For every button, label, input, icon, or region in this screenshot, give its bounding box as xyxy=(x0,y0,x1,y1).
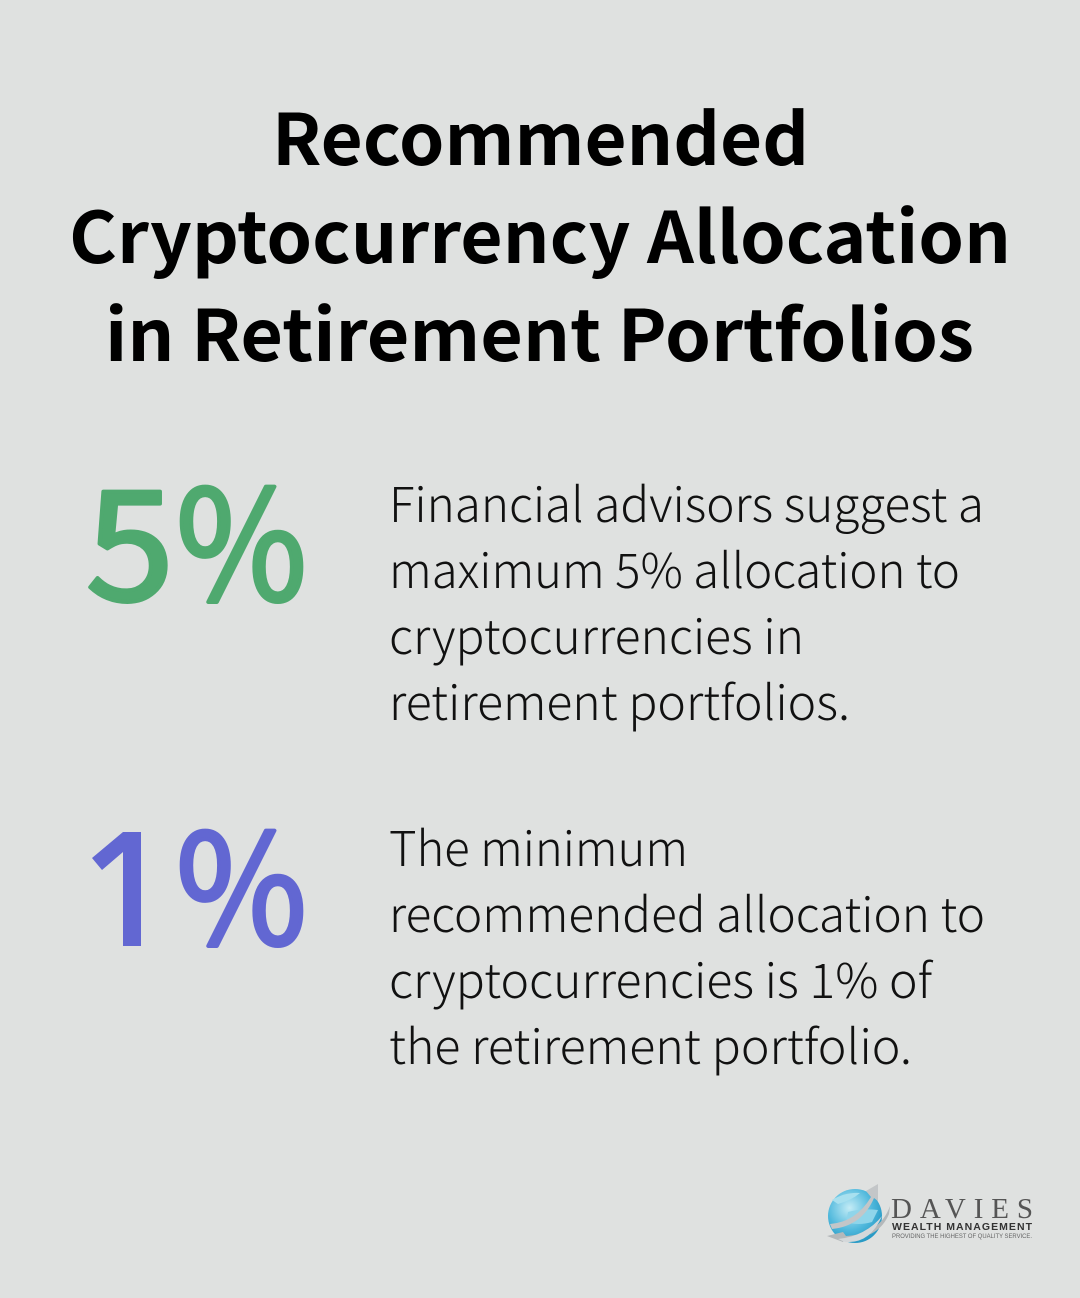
stat: 1% xyxy=(92,828,304,948)
title: Recommended xyxy=(272,84,809,186)
stat: 5%: 5 xyxy=(86,424,174,644)
description: 1% allocation: recommended allocation to xyxy=(389,876,985,946)
stat: 5%: % xyxy=(176,424,307,644)
title: in Retirement Portfolios xyxy=(105,280,974,382)
subtitle: WEALTH MANAGEMENT xyxy=(892,1221,1033,1233)
icon: globe with arrows xyxy=(827,1184,890,1243)
description: 1% allocation: cryptocurrencies is 1% of xyxy=(389,942,934,1012)
title xyxy=(69,84,1011,382)
description: 5% allocation xyxy=(389,466,984,734)
description: 1% allocation: the retirement portfolio. xyxy=(389,1008,912,1078)
description: 5% allocation: cryptocurrencies in xyxy=(389,598,804,668)
description: 1% allocation: The minimum xyxy=(389,810,688,880)
title: Cryptocurrency Allocation xyxy=(69,182,1011,284)
description: 5% allocation: maximum 5% allocation to xyxy=(389,532,960,602)
description: 1% allocation xyxy=(389,810,985,1078)
tagline: PROVIDING THE HIGHEST OF QUALITY SERVICE. xyxy=(892,1233,1032,1240)
description: 5% allocation: Financial advisors suggest a xyxy=(389,466,984,536)
stat: 1%: 1 xyxy=(88,768,178,988)
stat: 5% xyxy=(86,424,307,644)
description: 5% allocation: retirement portfolios. xyxy=(389,664,850,734)
stat: 1%: % xyxy=(176,768,307,988)
wordmark: DAVIES xyxy=(891,1193,1033,1225)
logo: Davies Wealth Management xyxy=(827,1184,1033,1243)
